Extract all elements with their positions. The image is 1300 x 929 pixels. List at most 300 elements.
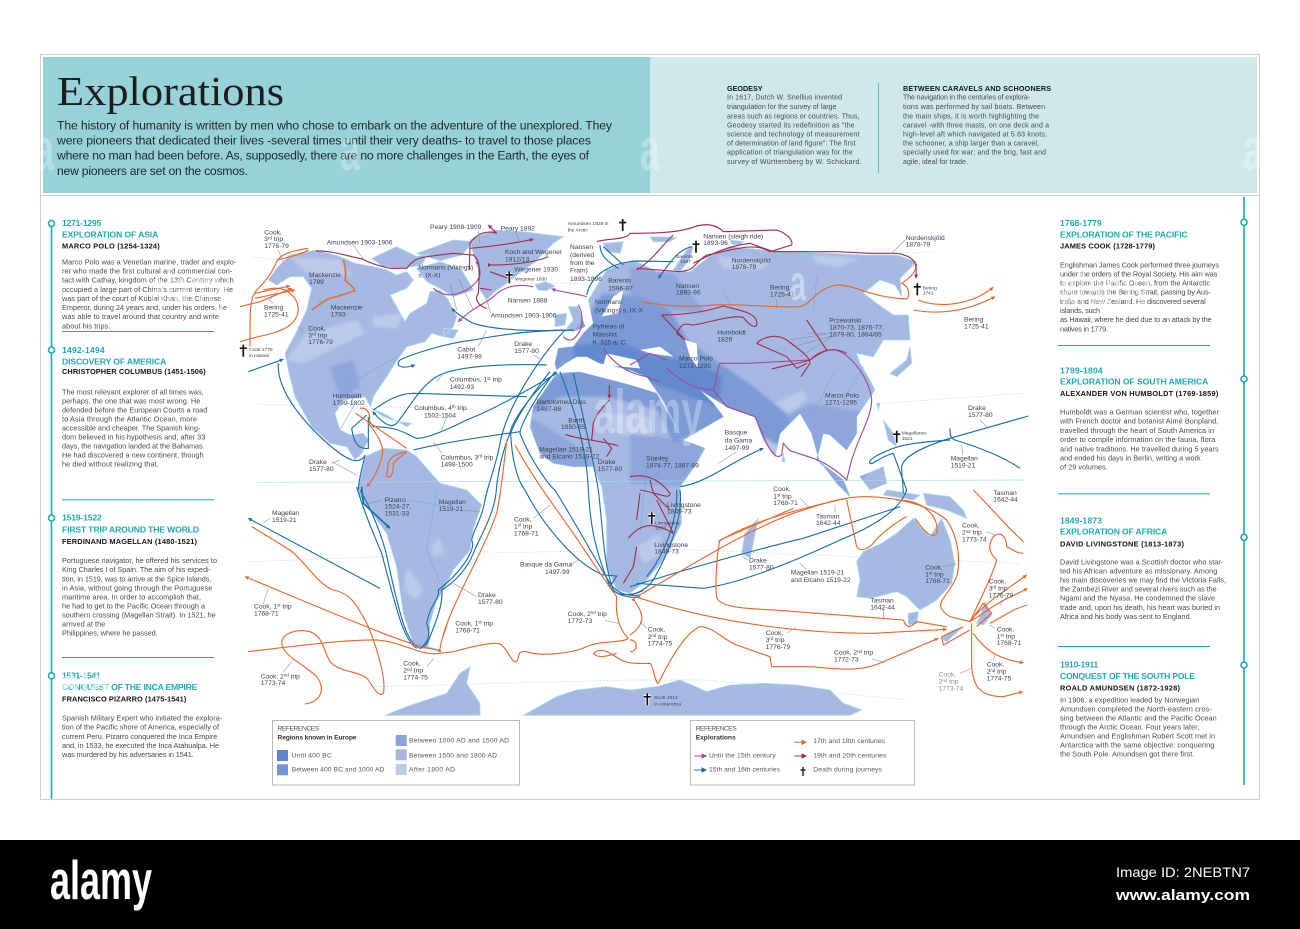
intro text: were pioneers that dedicated their lives -several times until their very deaths- to travel to those places (56, 133, 591, 147)
text block: Discovery of America: 1492-1494 (62, 345, 105, 355)
label: Cook 2nd trip Africa: trip (656, 634, 668, 641)
label: Nansen 1888: Nansen 1888 (508, 297, 548, 304)
watermark: a (1243, 116, 1263, 183)
text block: Exploration of Africa: DAVID LIVINGSTONE (1813-1873) (1060, 539, 1185, 548)
text block: Exploration of the Pacific: natives in 1779. (1060, 324, 1108, 333)
label: Pizarro: 1531-33 (385, 510, 410, 517)
text block: Conquest of the Inca Empire (61, 670, 223, 759)
text block: Exploration of Africa: EXPLORATION OF AFRICA (1060, 527, 1167, 537)
text block: Exploration of Asia: was part of the court of Kublai Khan, the Chinese (61, 294, 221, 303)
label: Cook 2nd trip 1774-75 Horn: 1774-75 (403, 675, 428, 682)
label: Livingstone south: Livingstone (654, 542, 688, 549)
text block: Discovery of America: DISCOVERY OF AMERICA (62, 356, 166, 366)
world map (240, 220, 1028, 715)
footer url: www.alamy.com (1115, 887, 1250, 904)
text block: Discovery of America (62, 345, 207, 469)
label: Drake Atlantic: 1577-80 (514, 348, 539, 355)
sidebar: Between caravels and schooners: The navigation in the centuries of explora- (903, 95, 1031, 102)
label: Cook 1st trip Atlantic: Cook, (514, 517, 532, 524)
watermark: ala (60, 662, 111, 703)
label: Nordenskjold Russia: Nordenskjöld (732, 257, 771, 264)
label: Cook 1st trip NZ: 1 (997, 632, 1015, 640)
text block: Exploration of the Pacific: under the orders of the Royal Society. His aim was (1060, 270, 1218, 279)
text block: Exploration of Asia: EXPLORATION OF ASIA (62, 230, 158, 240)
map labels (249, 221, 1022, 708)
label: Humboldt 1799: 1799-1802 (333, 400, 365, 407)
label: Cook death: Cook 1779 (249, 347, 273, 353)
label: Cook 2nd trip 1772-73 Indian: 1772-73 (834, 657, 859, 664)
label: Pytheas: Pytheas of (593, 323, 624, 330)
label: Magellan Brazil: Magellan (439, 499, 466, 506)
text block: Exploration of South America: order to compile information on the fauna, flora (1060, 435, 1216, 444)
text block: Exploration of Africa: trade and, upon his death, his heart was buried in (1060, 603, 1220, 612)
text block: First trip around the world: King Charles I of Spain. The aim of his expedi- (62, 565, 212, 574)
label: Magellan and Elcano Indian: Magellan 1519-21 (791, 570, 845, 577)
watermark: a (340, 116, 360, 183)
label: Cook 1st trip SW Pacific: st (277, 602, 281, 608)
label: Cook 2nd trip Coral Sea: nd (966, 529, 971, 534)
label: Amundsen 1928: Amundsen 1928 in (568, 221, 609, 227)
label: Livingstone death: Livingstone (655, 520, 680, 526)
label: Columbus 3rd: rd (478, 454, 483, 458)
label: Cook 1st trip Atlantic: trip (521, 523, 533, 530)
label: Cook 1st trip Australia: trip (932, 571, 944, 578)
label: Magallanes death: Magallanes (902, 430, 927, 436)
label: Cook 1st trip Australia: 1768-71 (925, 578, 950, 585)
label: Magellan and Elcano Indian: and Elcano 1519-22 (791, 577, 851, 584)
rivers (340, 277, 863, 583)
text block: Conquest of the Inca Empire: and, in 1533, he executed the Inca Atahualpa. He (62, 741, 219, 750)
label: Drake Argentina: Drake (478, 592, 496, 599)
label: Cook 3rd trip north: 3 (264, 235, 283, 243)
label: Barents death: Barents (676, 254, 693, 260)
label: Wegener 1930 death: Wegener 1930 (515, 277, 547, 283)
label: Basque da Gama Atlantic: Basque da Gama (520, 562, 572, 569)
label: Cook 2nd trip 1772-73 Atlantic: nd (591, 610, 596, 615)
label: Cook 2nd trip 1774-75 Horn: nd (407, 667, 412, 672)
legend: regions known in Europe (272, 720, 520, 785)
label: Cook 1st trip Atlantic: 1768-71 (514, 530, 539, 537)
text block: Exploration of South America: EXPLORATION OF SOUTH AMERICA (1060, 377, 1208, 387)
text block: Exploration of the Pacific: islands, such (1060, 306, 1100, 315)
label: Livingstone south: 1849-73 (654, 549, 679, 556)
label: Cook 2nd trip 1772-73 Atlantic: trip (596, 611, 607, 618)
label: Pytheas: h. 325 a. C. (593, 340, 627, 346)
label: Columbus 1st: st (487, 376, 491, 381)
label: Barents: 1596-97 (608, 286, 633, 293)
label: Drake Africa: 1577-80 (598, 466, 623, 473)
legend: explorations: 17th and 18th centuries (813, 738, 886, 745)
label: Wegener 1930: Wegener 1930 (514, 267, 558, 274)
text block: Conquest of the Inca Empire: Spanish Military Expert who initiated the explora- (62, 714, 223, 723)
label: Normans west: s. IX-XI (418, 273, 440, 280)
label: Cook 2nd trip 1773-74 Pacific: trip (289, 673, 300, 680)
footer bar (0, 840, 1300, 929)
label: Pytheas: Massilia (593, 332, 617, 338)
label: Pizarro: Pizarro (385, 497, 406, 504)
label: Cook 2nd trip 1774-75 Horn: trip (412, 668, 423, 675)
label: Peary 1908: Peary 1908-1909 (430, 224, 482, 231)
label: Nansen Fram: Nansen (570, 244, 593, 251)
text block: First trip around the world: FERDINAND MAGELLAN (1480-1521) (62, 537, 198, 546)
sidebar: Geodesy: of determination of land figure": The first (727, 140, 856, 147)
label: Nansen Fram: from the (570, 260, 595, 267)
text block: Conquest of the Inca Empire: 1531-1541 (62, 670, 101, 680)
label: Cook 3rd trip America: 3 (308, 332, 327, 339)
label: Peary 1892: Peary 1892 (501, 225, 535, 232)
label: Cook 1st trip Australia: Cook, (925, 565, 943, 572)
label: Tasman south: Tasman (870, 597, 894, 604)
text block: Conquest of the Inca Empire: FRANCISCO PIZARRO (1475-1541) (62, 694, 187, 703)
label: Bering Pacific: 1725-41 (964, 323, 989, 330)
label: Cook 3rd trip Indian: Cook, (766, 630, 783, 637)
label: Drake Pacific: 1577-80 (968, 412, 993, 419)
text block: Exploration of Africa: David Livingstone was a Scottish doctor who star- (1060, 558, 1224, 567)
text block: First trip around the world: FIRST TRIP AROUND THE WORLD (62, 524, 199, 534)
label: Barth: Barth (568, 417, 585, 424)
text block: Exploration of Africa: 1849-1873 (1060, 515, 1102, 525)
text block: Discovery of America: he died without realizing that. (62, 460, 159, 469)
label: Cook 2nd trip Africa: Cook, (648, 627, 665, 634)
text block: Exploration of South America: of 29 volumes. (1060, 462, 1108, 471)
text block: Exploration of Asia: Marco Polo was a Venetian marine, trader and explo- (62, 258, 237, 267)
label: Cook 2nd trip Coral Sea: 2 (962, 529, 982, 537)
label: Przewalski: 1870-73, 1876-77, (829, 324, 884, 331)
label: Cook 3rd trip NZ: 3 (989, 584, 1008, 592)
text block: Conquest of the South Pole: CONQUEST OF THE SOUTH POLE (1060, 671, 1195, 681)
legend: explorations: 15th and 16th centuries (709, 766, 781, 773)
label: Nansen Russia: Nansen (676, 283, 699, 290)
label: Cook 2nd trip Africa: 2 (648, 633, 668, 641)
label: Cook 2nd trip south of NZ: 2 (939, 678, 959, 686)
label: Magellan South Pacific: Magellan (272, 510, 299, 517)
label: Cook 3rd trip north: 1776-79 (264, 243, 289, 250)
legend: regions known in Europe: Regions known in Europe (278, 734, 357, 741)
label: Cook 2nd trip east of NZ: 2 (987, 668, 1007, 676)
text block: First trip around the world: tion, in 1519, was to arrive at the Spice Islands, (62, 574, 211, 583)
label: Cook 3rd trip NZ: Cook, (989, 578, 1006, 585)
intro text: new pioneers are set on the cosmos. (57, 164, 248, 178)
text block: Conquest of the South Pole: Antarctica with the same objective: conquering (1060, 741, 1214, 750)
label: Mackenzie 1789: 1789 (309, 279, 324, 286)
label: Cook 1st trip S Atlantic: st (478, 620, 483, 624)
text block: Discovery of America: to Asia through the Atlantic Ocean, more (62, 415, 197, 424)
text block: Exploration of Africa: the Zambezi River and several rivers such as the (1060, 585, 1217, 594)
text block: Exploration of Africa: his main discoveries we may find the Victoria Falls, (1060, 576, 1226, 585)
legend: explorations: 19th and 20th centuries (813, 752, 887, 759)
label: Barents: Barents (608, 278, 632, 285)
text block: Exploration of Asia: Emperor, during 24 years and, under his orders, he (62, 303, 227, 312)
text block: Exploration of the Pacific: tralia and New Zealand. He discovered several (1060, 297, 1206, 306)
label: Bering death: Bering (923, 285, 937, 291)
label: Amundsen north: Amundsen 1903-1906 (327, 239, 393, 246)
text block: Discovery of America: He had discovered a new continent, though (62, 451, 204, 460)
text block: Conquest of the South Pole: Amundsen and Englishman Robert Scott met in (1060, 732, 1215, 741)
label: Cook 1st trip Indonesia: 1768-71 (773, 500, 798, 507)
label: Nansen Russia: 1893-96 (676, 290, 701, 297)
sidebar: Between caravels and schooners: the schooner, a ship larger than a caravel, (903, 140, 1039, 147)
label: Cook 3rd trip north: Cook, (264, 229, 282, 236)
label: Mackenzie 1793: Mackenzie (331, 305, 363, 312)
page frame (40, 54, 1260, 800)
label: Mackenzie 1793: 1793 (331, 311, 346, 318)
text block: Exploration of South America: with French doctor and botanist Aimé Bonpland, (1059, 417, 1218, 426)
watermark (34, 116, 1263, 703)
label: Bering Pacific: Bering (964, 317, 984, 324)
leader lines (263, 220, 1007, 673)
header panel: title and intro (43, 57, 650, 193)
sidebar: Between caravels and schooners: high-level aft which navigated at 5.83 knots; (903, 131, 1047, 138)
label: Nordenskjold east: 1878-79 (906, 242, 931, 249)
label: Drake Pacific coast: 1577-80 (309, 466, 334, 473)
label: Marco Polo China: Marco Polo (825, 392, 859, 399)
label: Basque da Gama India: da Gama (725, 438, 752, 445)
text block: First trip around the world: arrived at the (62, 619, 105, 628)
label: Marco Polo west: Marco Polo (679, 356, 713, 363)
sidebar: Between caravels and schooners: tions was performed by sail boats. Between (903, 104, 1045, 111)
label: Cook 1st trip Indonesia: st (777, 492, 781, 498)
label: Humboldt 1829: Humboldt (717, 330, 746, 337)
label: Cook 1st trip NZ: Cook, (997, 626, 1014, 633)
label: Pizarro: 1524-27, (385, 504, 411, 511)
label: Drake Indian: 1577-80 (749, 564, 774, 571)
label: Cook 2nd trip Coral Sea: trip (971, 530, 982, 537)
label: Cabot: 1497-98 (457, 353, 482, 360)
text block: Conquest of the South Pole: ROALD AMUNDSEN (1872-1928) (1060, 683, 1181, 692)
sidebar: Geodesy: triangulation for the survey of large (727, 104, 837, 111)
text block: Conquest of the South Pole (1060, 659, 1217, 759)
label: Cook 1st trip NZ: st (1000, 632, 1005, 638)
label: Cook 1st trip NZ: trip (1004, 633, 1015, 640)
label: Columbus 3rd: Columbus, 3 (441, 454, 494, 461)
label: Nordenskjold east: Nordenskjöld (906, 235, 945, 242)
label: Cook 1st trip Indonesia: 1 (773, 492, 792, 500)
label: Cook 2nd trip east of NZ: Cook, (987, 662, 1004, 669)
label: Bering west: Bering (264, 305, 284, 312)
text block: First trip around the world (62, 513, 217, 638)
label: Cook 3rd trip north: rd (268, 235, 272, 240)
label: Marco Polo west: 1271-1295 (679, 363, 711, 370)
label: Cook 2nd trip south of NZ: Cook, (939, 672, 956, 679)
label: Cook 3rd trip Indian: trip (773, 637, 785, 644)
label: Nansen Fram: (derived (570, 252, 594, 259)
text block: Exploration of Africa (1060, 515, 1226, 621)
label: Cook 3rd trip America: rd (312, 332, 316, 336)
label: Bering Siberia: Bering (770, 285, 790, 292)
label: Cook 1st trip SW Pacific: trip (280, 603, 292, 610)
label: Scott death: in Antarctica (654, 702, 681, 708)
label: Cook 3rd trip north: trip (272, 236, 283, 243)
label: Drake Indian: Drake (749, 557, 767, 564)
label: Nansen Fram: 1893-1896 (570, 276, 602, 283)
label: Cook 2nd trip 1773-74 Pacific: nd (284, 672, 289, 678)
text block: Exploration of the Pacific: JAMES COOK (1728-1779) (1060, 242, 1156, 251)
text block: Discovery of America: defended before the European Courts a road (62, 406, 207, 415)
label: Magallanes death: 1521 (902, 436, 913, 442)
label: Tasman south: 1642-44 (870, 604, 895, 611)
text block: Exploration of the Pacific: shore towards the Bering Strait, passing by Aus- (1060, 288, 1212, 297)
label: Cook 2nd trip south of NZ: nd (942, 678, 948, 683)
watermark: alamy (593, 378, 703, 447)
label: Cook 2nd trip east of NZ: 1774-75 (987, 675, 1012, 682)
label: Scott death: Scott 1912 (654, 695, 678, 701)
text block: Exploration of South America: and native traditions. He travelled during 5 years (1060, 444, 1219, 453)
footer logo: alamy (50, 849, 152, 911)
label: Columbus 3rd: trip (482, 454, 494, 461)
text block: Discovery of America: CHRISTOPHER COLUMBUS (1451-1506) (62, 367, 206, 376)
watermark: alamy (150, 260, 230, 316)
label: Bering death: 1741 (923, 291, 934, 297)
text block: Exploration of the Pacific: 1768-1779 (1060, 218, 1102, 228)
title: Explorations (57, 68, 284, 114)
label: Magellan and Elcano Atlantic: Magellan 1519-21 (539, 447, 593, 454)
label: Livingstone north: 1849-73 (667, 509, 692, 516)
intro text (56, 118, 613, 178)
watermark: a (640, 116, 660, 183)
label: Bartolomeu Dias: 1487-88 (537, 406, 562, 413)
label: Cook 3rd trip Indian: 3 (766, 636, 785, 644)
grid lines (257, 480, 1023, 482)
label: Cook 1st trip NZ: 1768-71 (997, 640, 1022, 647)
watermark: a (790, 255, 807, 311)
text block: Discovery of America: perhaps, the one that was most wrong. He (62, 397, 200, 406)
text block: Conquest of the South Pole: 1910-1911 (1060, 659, 1099, 669)
label: Tasman Indian: Tasman (816, 513, 840, 520)
label: Normans east: Normans (595, 299, 623, 306)
text block: Conquest of the South Pole: through the Arctic Ocean. Four years later, (1060, 723, 1199, 732)
text block: Conquest of the South Pole: sing between the Atlantic and the Pacific Ocean (1060, 714, 1217, 723)
label: Nansen Fram: Fram) (570, 268, 588, 275)
label: Cook 2nd trip 1772-73 Indian: nd (857, 649, 863, 654)
label: Przewalski: 1879-80, 1884/85 (829, 331, 882, 338)
label: Stanley: Stanley (646, 456, 669, 463)
label: Cook 2nd trip 1772-73 Atlantic: Cook, 2 (568, 610, 607, 618)
label: Cook 2nd trip 1772-73 Indian: trip (862, 650, 873, 657)
text block: Conquest of the Inca Empire: tion of the Pacific shore of America, especially of (62, 723, 220, 732)
text block: Conquest of the South Pole: the South Pole. Amundsen got there first. (1060, 750, 1194, 759)
label: Tasman north: Tasman (993, 490, 1017, 497)
label: Drake Pacific coast: Drake (309, 459, 327, 466)
text block: Discovery of America: days, the navigation landed at the Bahamas. (62, 442, 205, 451)
label: Cook 2nd trip 1773-74 Pacific: 1773-74 (261, 680, 286, 687)
label: Bering west: 1725-41 (264, 312, 289, 319)
sidebar: Geodesy (727, 84, 862, 166)
label: Cook 1st trip SW Pacific: 1768-71 (254, 610, 279, 617)
sidebar: Between caravels and schooners: agile, ideal for trade. (903, 159, 968, 166)
label: Cook 2nd trip 1774-75 Horn: Cook, (403, 661, 421, 668)
text block: Exploration of Asia: was able to travel around that country and write (61, 312, 219, 321)
legend: regions known in Europe: Between 1000 AD and 1500 AD (409, 737, 509, 744)
text block: Exploration of South America: and ended his days in Berlin, writing a work (1060, 453, 1201, 462)
text block: Exploration of the Pacific (1060, 218, 1219, 333)
route: Normans, Pytheas and Marco Polo (until 15th century) (433, 265, 872, 480)
legend: explorations: Until the 15th century (709, 752, 776, 759)
intro text: where no man had been before. As, supposedly, there are no more challenges in the Earth, the eyes of (56, 148, 590, 162)
sidebar: Geodesy: In 1617, Dutch W. Snellius invented (727, 95, 842, 102)
text block: Conquest of the Inca Empire: current Peru. Pizarro conquered the Inca Empire (62, 732, 217, 741)
label: Cook 3rd trip Indian: 1776-79 (766, 644, 791, 651)
label: Basque da Gama India: 1497-99 (725, 445, 750, 452)
text block: Exploration of Asia: MARCO POLO (1254-1324) (62, 242, 160, 251)
text block: First trip around the world: Philippines, where he passed. (62, 629, 158, 638)
label: Drake Pacific: Drake (968, 405, 986, 412)
label: Magellan Pacific: Magellan (951, 455, 978, 462)
text block: Exploration of Africa: ted his African adventure as missionary. Among (1060, 567, 1217, 576)
text block: Exploration of South America (1059, 365, 1220, 471)
label: Magellan Pacific: 1519-21 (951, 462, 976, 469)
label: Amundsen east: Amundsen 1903-1906 (491, 313, 557, 320)
label: Livingstone death: 1873 (655, 526, 666, 532)
label: Columbus 4th: trip (456, 405, 467, 412)
left timeline (48, 220, 54, 799)
text block: Discovery of America: accessible and cheaper. The Spanish king- (62, 424, 201, 433)
label: Drake Africa: Drake (598, 459, 616, 466)
label: Cook 2nd trip Africa: 1774-75 (648, 641, 673, 648)
label: Columbus 1st: Columbus, 1 (450, 376, 502, 384)
label: Cook 1st trip Indonesia: trip (780, 493, 792, 500)
label: Columbus 1st: 1492-93 (450, 384, 475, 391)
label: Columbus 3rd: 1498-1500 (441, 461, 473, 468)
label: Cook 2nd trip Coral Sea: 1773-74 (962, 537, 987, 544)
label: Magellan South Pacific: 1519-21 (272, 517, 297, 524)
sidebar: Between caravels and schooners: the main ships, it is worth highlighting the (903, 113, 1039, 120)
label: Cook 3rd trip NZ: 1776-79 (989, 592, 1014, 599)
label: Cook 1st trip S Atlantic: trip (482, 620, 493, 627)
label: Cook 2nd trip 1773-74 Pacific: Cook, 2 (261, 672, 300, 680)
label: Cook 2nd trip east of NZ: trip (995, 669, 1007, 676)
text block: Exploration of the Pacific: as Hawaii, where he died due to an attack by the (1060, 315, 1212, 324)
text block: Discovery of America: The most relevant explorer of all times was, (62, 388, 204, 397)
label: Nordenskjold Russia: 1878-79 (732, 264, 757, 271)
label: Cook 2nd trip 1772-73 Atlantic: 1772-73 (568, 618, 593, 625)
label: Magellan Brazil: 1519-21 (439, 506, 464, 513)
label: Stanley: 1874-77, 1887-89 (646, 463, 699, 470)
label: Magellan and Elcano Atlantic: and Elcano 1519-22 (539, 454, 599, 461)
header panel: sidebars (650, 57, 1257, 193)
label: Cook death: in Hawaii (249, 353, 269, 359)
legend: regions known in Europe: Until 400 BC (292, 752, 332, 759)
legend: explorations (690, 720, 914, 785)
right timeline (1241, 197, 1247, 785)
label: Cook 1st trip Indonesia: Cook, (773, 486, 791, 493)
label: Columbus 1st: trip (491, 377, 502, 384)
sidebar: Between caravels and schooners: specially used for war; and the brig, fast and (903, 149, 1046, 156)
label: Cook 3rd trip America: Cook, (308, 326, 326, 333)
label: Normans east: (Vikings) s. IX-X (595, 307, 643, 314)
label: Amundsen 1928: the Arctic (568, 227, 588, 233)
label: Barth: 1850-55 (561, 424, 586, 431)
text block: First trip around the world: Portuguese navigator, he offered his services to (62, 556, 217, 565)
sidebar: Geodesy: survey of Württemberg by W. Schickard. (727, 159, 862, 166)
text block: Conquest of the South Pole: In 1906, a expedition leaded by Norwegian (1060, 696, 1199, 705)
sidebar: Geodesy: Geodesy started its redefinition as "the (727, 123, 855, 130)
label: Basque da Gama India: Basque (725, 430, 748, 437)
text block: Conquest of the Inca Empire: CONQUEST OF THE INCA EMPIRE (62, 682, 198, 692)
label: Cook 2nd trip Africa: nd (651, 633, 657, 638)
text block: Exploration of Africa: Africa and his body was sent to England. (1060, 612, 1192, 621)
label: Columbus 4th: th (452, 404, 456, 409)
intro text: The history of humanity is written by men who chose to embark on the adventure of the unexplored. They (57, 118, 613, 132)
sidebar: Geodesy: areas such as regions or countries. Thus, (727, 113, 860, 120)
text block: Exploration of Africa: Ngami and the Nyasa. He condemned the slave (1060, 594, 1215, 603)
label: Humboldt 1829: 1829 (717, 336, 732, 343)
label: Nansen sleigh: 1893-96 (703, 240, 728, 247)
label: Cook 3rd trip America: 1776-79 (308, 339, 333, 346)
sidebar: Geodesy: GEODESY (727, 84, 763, 93)
text block: Exploration of Asia (61, 218, 237, 330)
text block: Exploration of the Pacific: EXPLORATION OF THE PACIFIC (1060, 229, 1188, 239)
label: Cook 2nd trip 1772-73 Indian: Cook, 2 (834, 649, 873, 657)
